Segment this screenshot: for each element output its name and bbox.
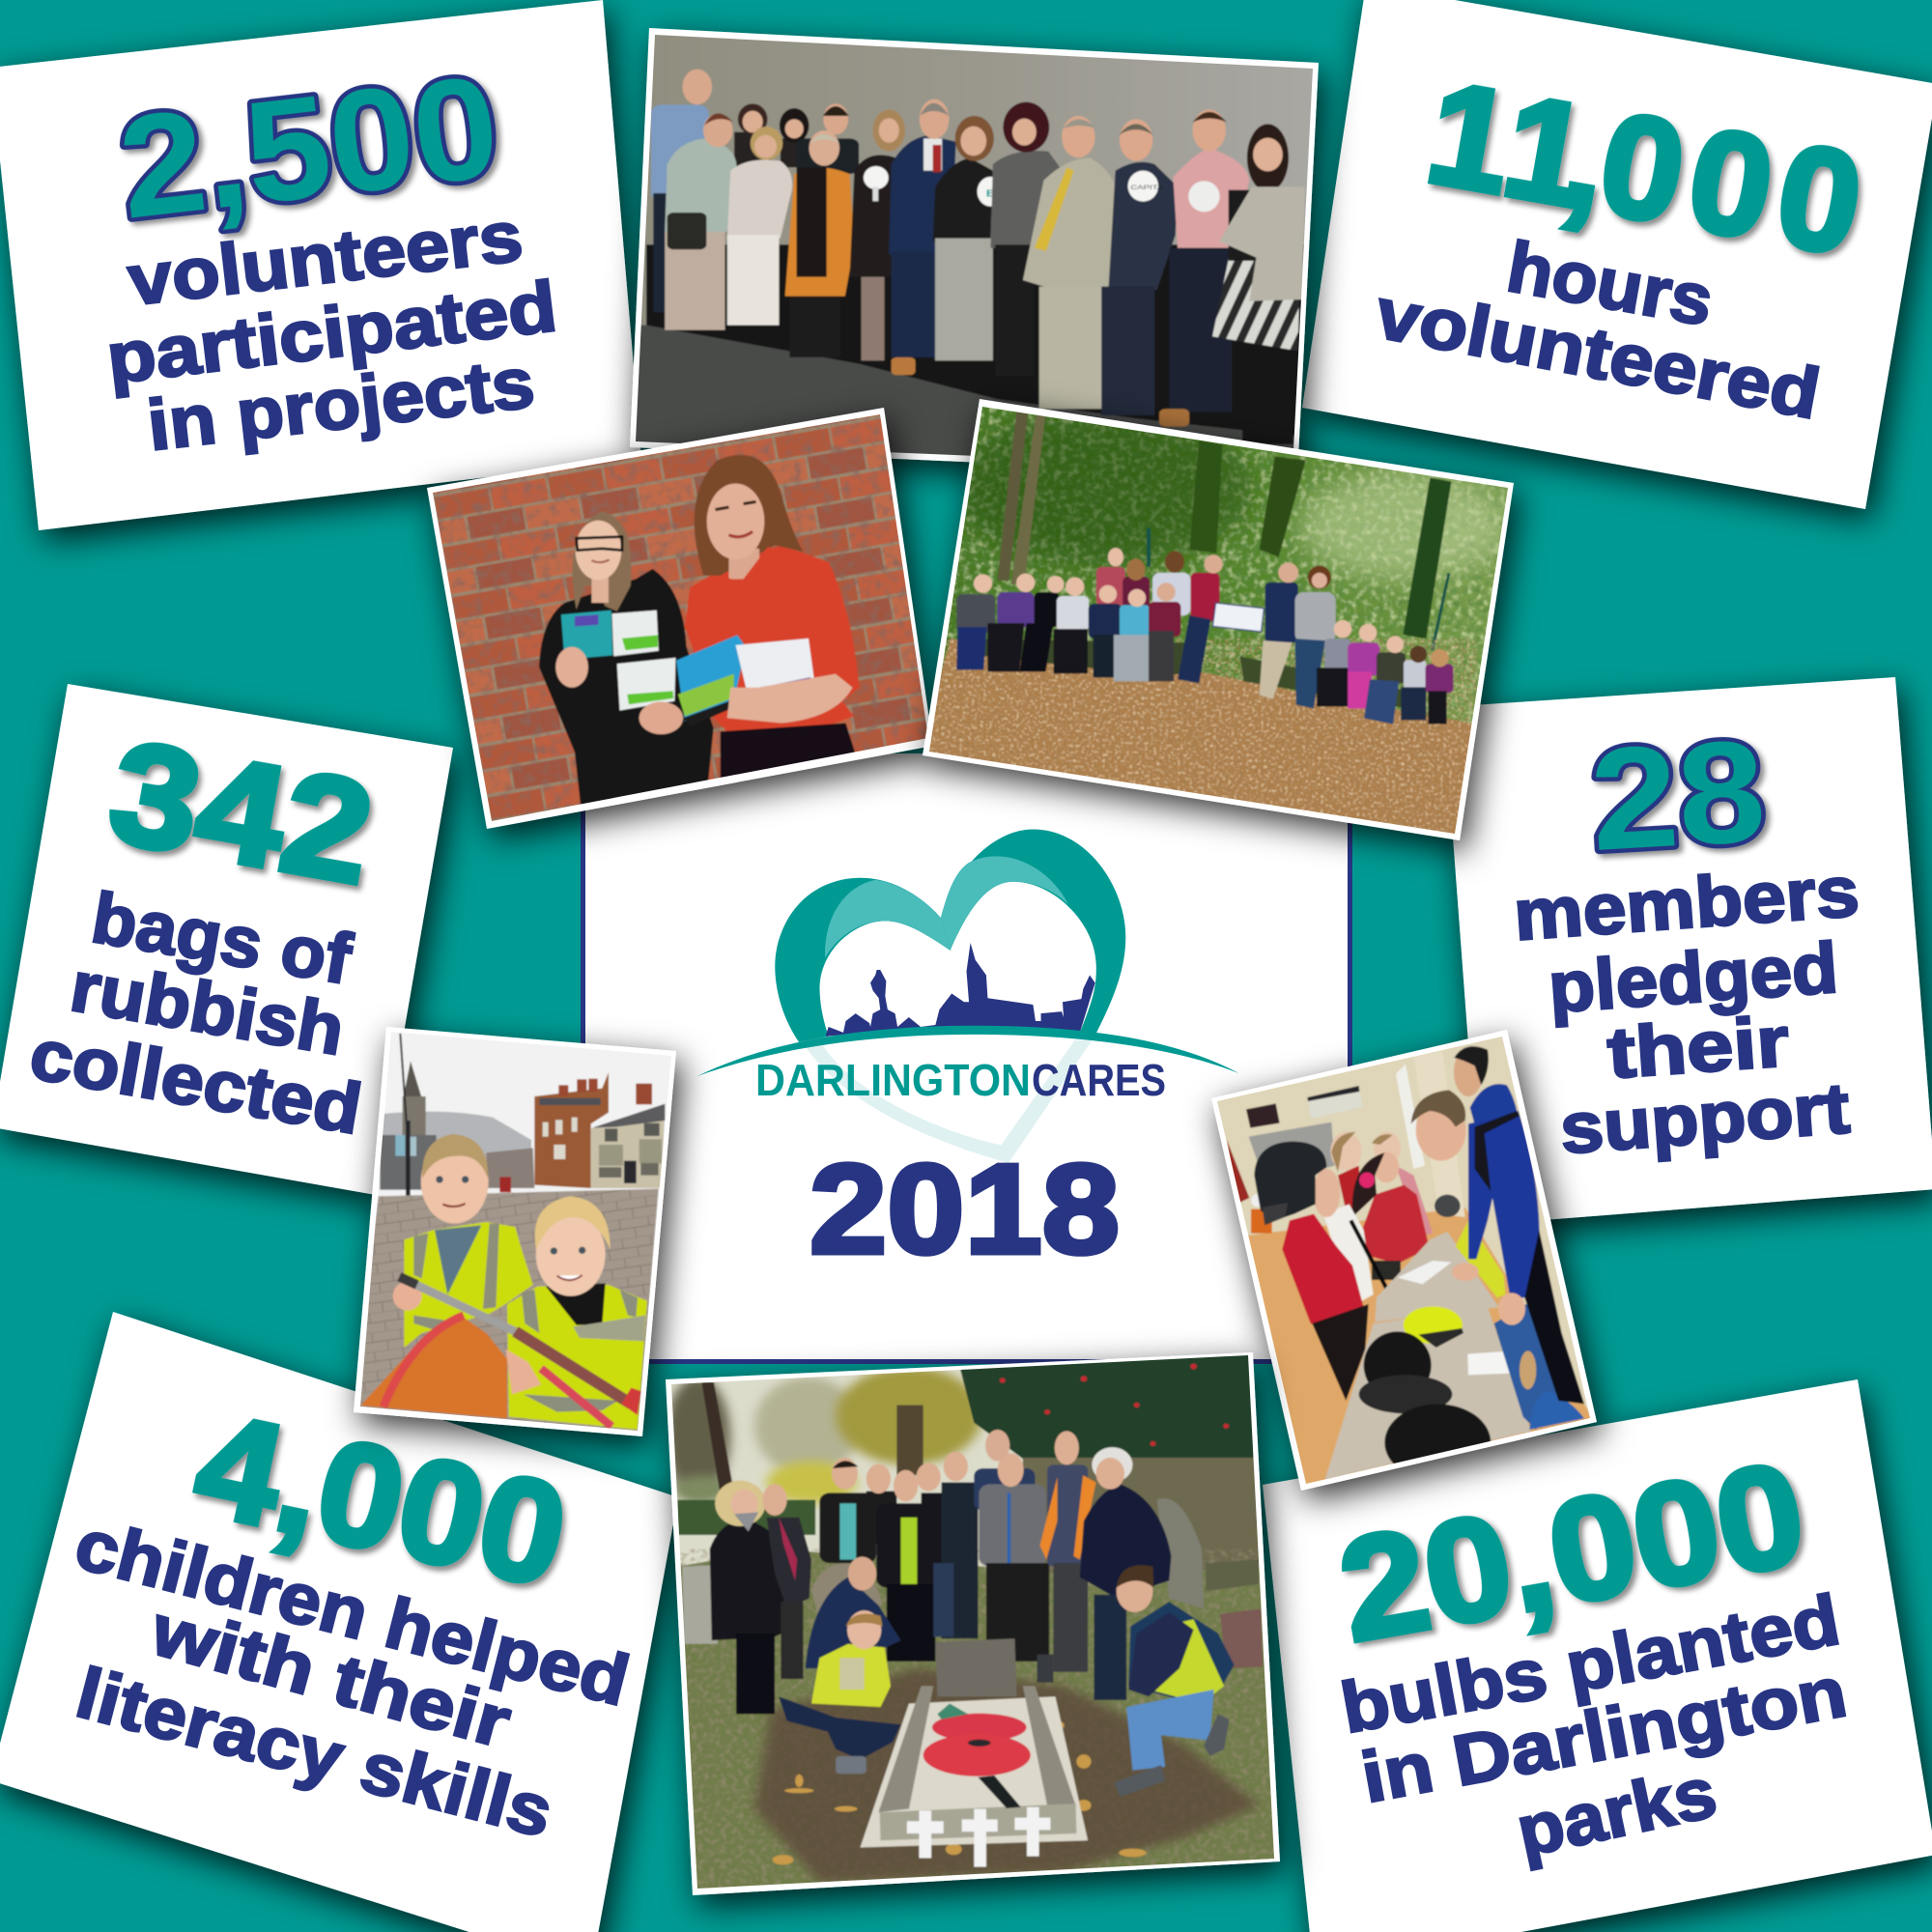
photo: group with partner signs xyxy=(628,19,1352,476)
woman orange top xyxy=(685,545,860,740)
panel: 11,000 hours xyxy=(1302,0,1932,509)
man dark suit xyxy=(1108,162,1178,290)
bark ground xyxy=(918,639,1477,840)
woman cardigan xyxy=(1242,429,1294,444)
text: children helped with their literacy skills: with their xyxy=(143,1589,519,1763)
grass and soil xyxy=(657,1549,1294,1915)
standing officer back xyxy=(1470,1084,1520,1159)
grave xyxy=(935,1638,1016,1696)
text: hours volunteered: volunteered xyxy=(1370,272,1826,434)
text: volunteers participated in projects: volunteers xyxy=(124,195,526,321)
hats xyxy=(1404,1306,1463,1344)
text: members pledged their support: members xyxy=(1511,851,1861,955)
trunks xyxy=(997,410,1029,581)
text: bags of rubbish collected: rubbish xyxy=(65,946,350,1070)
woman glasses xyxy=(539,569,714,812)
boy two xyxy=(507,1285,647,1430)
photo: poppy grave restoration group xyxy=(657,1352,1307,1915)
headstones xyxy=(682,1565,718,1644)
leaning officer xyxy=(1468,1111,1540,1297)
table xyxy=(1375,1232,1499,1321)
year: 2018: 2018 xyxy=(810,1138,1120,1280)
text: members pledged their support: their xyxy=(1605,1001,1792,1094)
text: bulbs planted in Darlington parks xyxy=(1335,1579,1853,1872)
crosses xyxy=(907,1807,1050,1867)
hands xyxy=(555,647,588,688)
text: members pledged their support xyxy=(1511,851,1861,1169)
woman pale xyxy=(727,159,792,239)
hi vis hoodie boy xyxy=(1047,1464,1088,1567)
text: bulbs planted in Darlington parks: bulbs planted xyxy=(1335,1579,1845,1748)
paving xyxy=(348,1189,659,1442)
trees xyxy=(665,1377,730,1496)
number: 342: 342 xyxy=(99,709,384,914)
products xyxy=(561,611,612,660)
text: bulbs planted in Darlington parks: parks xyxy=(1510,1751,1723,1872)
panel: 28 members xyxy=(1443,677,1932,1225)
panel: 20,000 bulbs xyxy=(1263,1379,1932,1932)
white shirt boy xyxy=(1323,1205,1374,1301)
wood floor xyxy=(1239,1208,1594,1488)
text: hours volunteered: hours xyxy=(1501,226,1719,341)
puffer jacket boy xyxy=(876,1503,940,1588)
crouching man and boy xyxy=(806,1577,901,1668)
woman teal lanyard xyxy=(933,157,993,242)
text: bags of rubbish collected xyxy=(24,877,367,1150)
photo: two boys with litter picker in market place xyxy=(348,1024,702,1442)
lamp post xyxy=(399,1034,408,1130)
text: children helped with their literacy skills: literacy skills xyxy=(69,1652,561,1853)
number: 11,000: 11,000 xyxy=(1416,50,1873,286)
photo: police visit with schoolchildren xyxy=(1208,1024,1626,1507)
town clock and market xyxy=(403,1061,425,1137)
number: 28: 28 xyxy=(1586,709,1770,881)
text: children helped with their literacy skills xyxy=(68,1503,637,1853)
number: 4,000: 4,000 xyxy=(183,1381,580,1617)
street xyxy=(486,1148,534,1188)
man navy suit xyxy=(889,135,956,254)
man tie xyxy=(767,1518,811,1608)
chair xyxy=(1494,1304,1562,1430)
bags xyxy=(1435,1195,1461,1217)
man red xyxy=(1190,573,1220,621)
man pink shirt xyxy=(1173,148,1249,251)
photo: woodland group with cheque xyxy=(918,386,1526,852)
text: children helped with their literacy skills: children helped xyxy=(68,1503,637,1720)
man white hair xyxy=(1080,1484,1171,1598)
boy one xyxy=(404,1222,533,1348)
brick building xyxy=(534,1072,609,1188)
panel: 342 bags xyxy=(0,684,453,1195)
girls xyxy=(1330,1132,1361,1171)
text: members pledged their support: support xyxy=(1557,1067,1852,1169)
text: volunteers participated in projects: in projects xyxy=(143,342,538,466)
cheque xyxy=(1212,603,1264,632)
logo wordmark: CARES xyxy=(1032,1055,1166,1105)
logo: Darlington Cares heart and skyline xyxy=(696,830,1239,1163)
photo: two women with hygiene products against brick wall xyxy=(415,396,957,837)
girl red jumper xyxy=(1362,1185,1430,1264)
standing back kids xyxy=(1096,567,1125,606)
text: volunteers participated in projects xyxy=(102,195,561,466)
woman check top xyxy=(990,151,1063,248)
seated right xyxy=(1324,639,1350,671)
number: 2,500: 2,500 xyxy=(111,44,506,249)
benches xyxy=(968,639,1185,675)
boy red tee xyxy=(1282,1214,1364,1331)
wall items xyxy=(1246,1103,1280,1128)
seated left xyxy=(956,594,995,633)
woman lanyard xyxy=(665,138,737,232)
man cream suit xyxy=(1023,157,1120,297)
text: volunteers participated in projects: participated xyxy=(102,266,561,399)
woman grey xyxy=(1295,592,1336,642)
photo: group with partner signs: CAPITA xyxy=(1130,184,1164,191)
logo wordmark: DARLINGTON xyxy=(755,1055,1031,1105)
photo: group with partner signs: E xyxy=(986,187,995,199)
text: bags of rubbish collected: bags of xyxy=(86,877,357,999)
poppy xyxy=(932,1714,1027,1742)
man vest xyxy=(1265,582,1298,642)
panel: centre logo panel xyxy=(581,753,1352,1364)
number: 20,000: 20,000 xyxy=(1328,1431,1815,1672)
text: bulbs planted in Darlington parks: in Darlington xyxy=(1355,1651,1853,1818)
text: bags of rubbish collected: collected xyxy=(24,1013,367,1150)
woman blonde xyxy=(850,155,895,277)
standing back row xyxy=(819,1492,876,1563)
grey jacket boy xyxy=(979,1484,1046,1567)
text: hours volunteered xyxy=(1370,226,1826,434)
back row xyxy=(651,104,709,201)
text: members pledged their support: pledged xyxy=(1546,927,1840,1028)
panel: 4,000 children xyxy=(0,1312,678,1932)
woman black coat xyxy=(710,1518,811,1640)
hi vis xyxy=(1456,1220,1505,1297)
cream building xyxy=(591,1104,665,1188)
bag and picker xyxy=(360,1316,507,1418)
woman orange xyxy=(789,351,821,357)
boy backpack xyxy=(1128,1602,1235,1704)
panel: 2,500 volunteers xyxy=(0,0,641,530)
